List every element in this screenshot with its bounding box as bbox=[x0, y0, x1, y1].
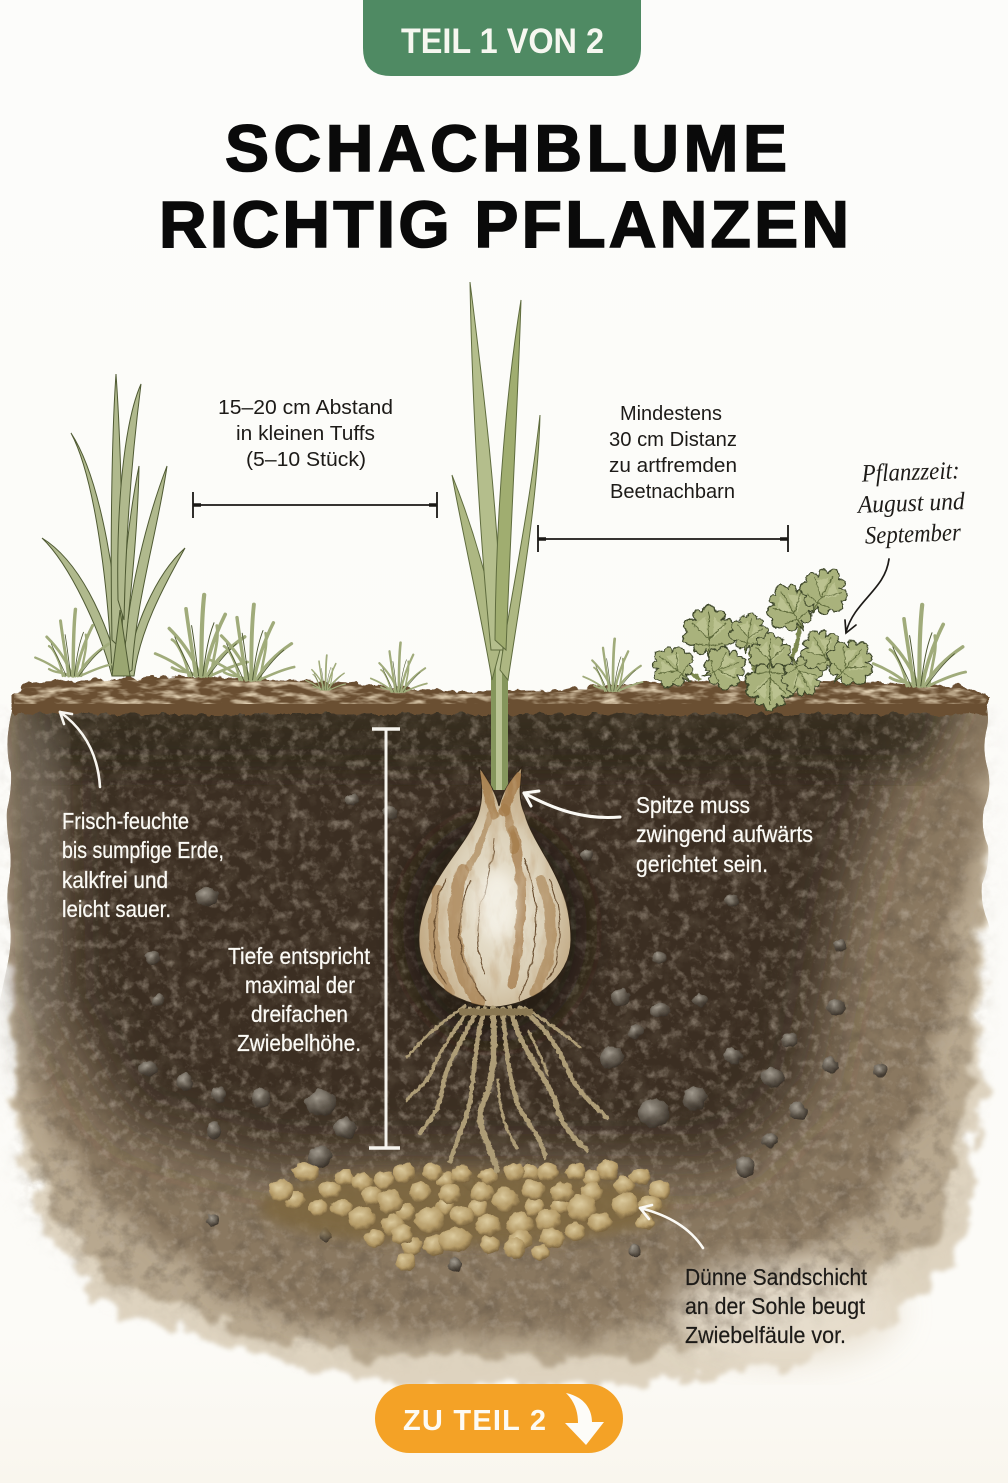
text: sand note bbox=[685, 1264, 868, 1348]
soil: outer light wash bbox=[0, 700, 1008, 1385]
topsoil crust bbox=[0, 670, 1008, 715]
text: distance label: zu artfremden bbox=[609, 454, 737, 477]
text: planting time bbox=[854, 457, 967, 550]
soil: dark humus core bbox=[50, 700, 915, 1165]
arrow: planting time bbox=[845, 559, 889, 633]
dimension: 30 cm bbox=[538, 525, 788, 552]
soil: light bay around sand note bbox=[670, 1260, 900, 1364]
text: spacing label: in kleinen Tuffs bbox=[236, 422, 375, 445]
text: distance label: Mindestens bbox=[620, 402, 722, 425]
text: soil note: bis sumpfige Erde, bbox=[62, 837, 224, 863]
text: depth note: dreifachen bbox=[251, 1001, 348, 1027]
text: planting time: Pflanzzeit: bbox=[860, 457, 960, 488]
bulb body bbox=[419, 767, 571, 1007]
text: soil note bbox=[62, 808, 224, 922]
small tufts left bbox=[35, 595, 427, 692]
text: sand note: Dünne Sandschicht bbox=[685, 1264, 868, 1290]
text: tip note: Spitze muss bbox=[636, 792, 750, 818]
soil: tan layer bbox=[0, 700, 1008, 1358]
soil: upper dark band bbox=[20, 690, 965, 770]
plant: lobed foliage bbox=[642, 558, 884, 711]
text: depth note: maximal der bbox=[245, 972, 355, 998]
bulb highlight bbox=[477, 871, 517, 939]
text: soil note: kalkfrei und bbox=[62, 867, 168, 893]
text: tip note: gerichtet sein. bbox=[636, 851, 768, 877]
sand wash bbox=[260, 1169, 670, 1245]
icon: down arrow bbox=[565, 1393, 604, 1445]
text: depth note: Tiefe entspricht bbox=[228, 943, 371, 969]
stones bbox=[139, 795, 887, 1272]
sand layer pebbles bbox=[268, 1160, 671, 1272]
plant: central stem and leaves bbox=[452, 282, 540, 790]
soil: mottled texture bbox=[0, 704, 1008, 1384]
text: spacing label bbox=[218, 396, 393, 471]
text: tip note bbox=[636, 792, 813, 877]
dimension: 15-20 cm bbox=[193, 492, 437, 518]
text: sand note: an der Sohle beugt bbox=[685, 1293, 866, 1319]
plant: right tufts bbox=[583, 605, 966, 691]
text: planting time: August und bbox=[855, 488, 966, 519]
button: to part 2: ZU TEIL 2 bbox=[403, 1405, 546, 1437]
bulb tan stripes bbox=[415, 765, 575, 1010]
text: depth note bbox=[228, 943, 371, 1056]
text: distance label: 30 cm Distanz bbox=[609, 428, 737, 451]
text: spacing label: (5–10 Stück) bbox=[246, 448, 366, 471]
text: distance label: Beetnachbarn bbox=[610, 480, 735, 503]
roots bbox=[407, 1006, 607, 1170]
plant: left grass clump bbox=[35, 374, 427, 692]
text: soil note: Frisch-feuchte bbox=[62, 808, 189, 834]
soil: grey left wash bbox=[8, 720, 60, 1100]
text: distance label bbox=[609, 402, 737, 503]
text: soil note: leicht sauer. bbox=[62, 896, 171, 922]
arrow: tip bbox=[524, 791, 620, 818]
dark halo behind bulb bbox=[403, 818, 587, 1042]
text: spacing label: 15–20 cm Abstand bbox=[218, 396, 393, 419]
text: tip note: zwingend aufwärts bbox=[636, 821, 813, 847]
bulb bbox=[415, 765, 575, 1010]
text: planting time: September bbox=[864, 519, 962, 550]
title: RICHTIG PFLANZEN bbox=[159, 187, 849, 261]
arrow: soil bbox=[60, 712, 100, 787]
text: depth note: Zwiebelhöhe. bbox=[237, 1030, 361, 1056]
title bbox=[159, 111, 849, 261]
arrow: sand bbox=[640, 1205, 703, 1248]
left plant blades bbox=[42, 374, 185, 676]
button: to part 2 bbox=[375, 1384, 623, 1453]
title: SCHACHBLUME bbox=[225, 111, 787, 185]
badge: part 1 of 2 bbox=[363, 0, 641, 76]
text: sand note: Zwiebelfäule vor. bbox=[685, 1322, 846, 1348]
soil cross-section bbox=[0, 670, 1008, 1385]
badge: part 1 of 2: TEIL 1 VON 2 bbox=[401, 22, 604, 61]
depth bracket bbox=[369, 729, 400, 1148]
soil: mid brown layer bbox=[0, 700, 1008, 1335]
